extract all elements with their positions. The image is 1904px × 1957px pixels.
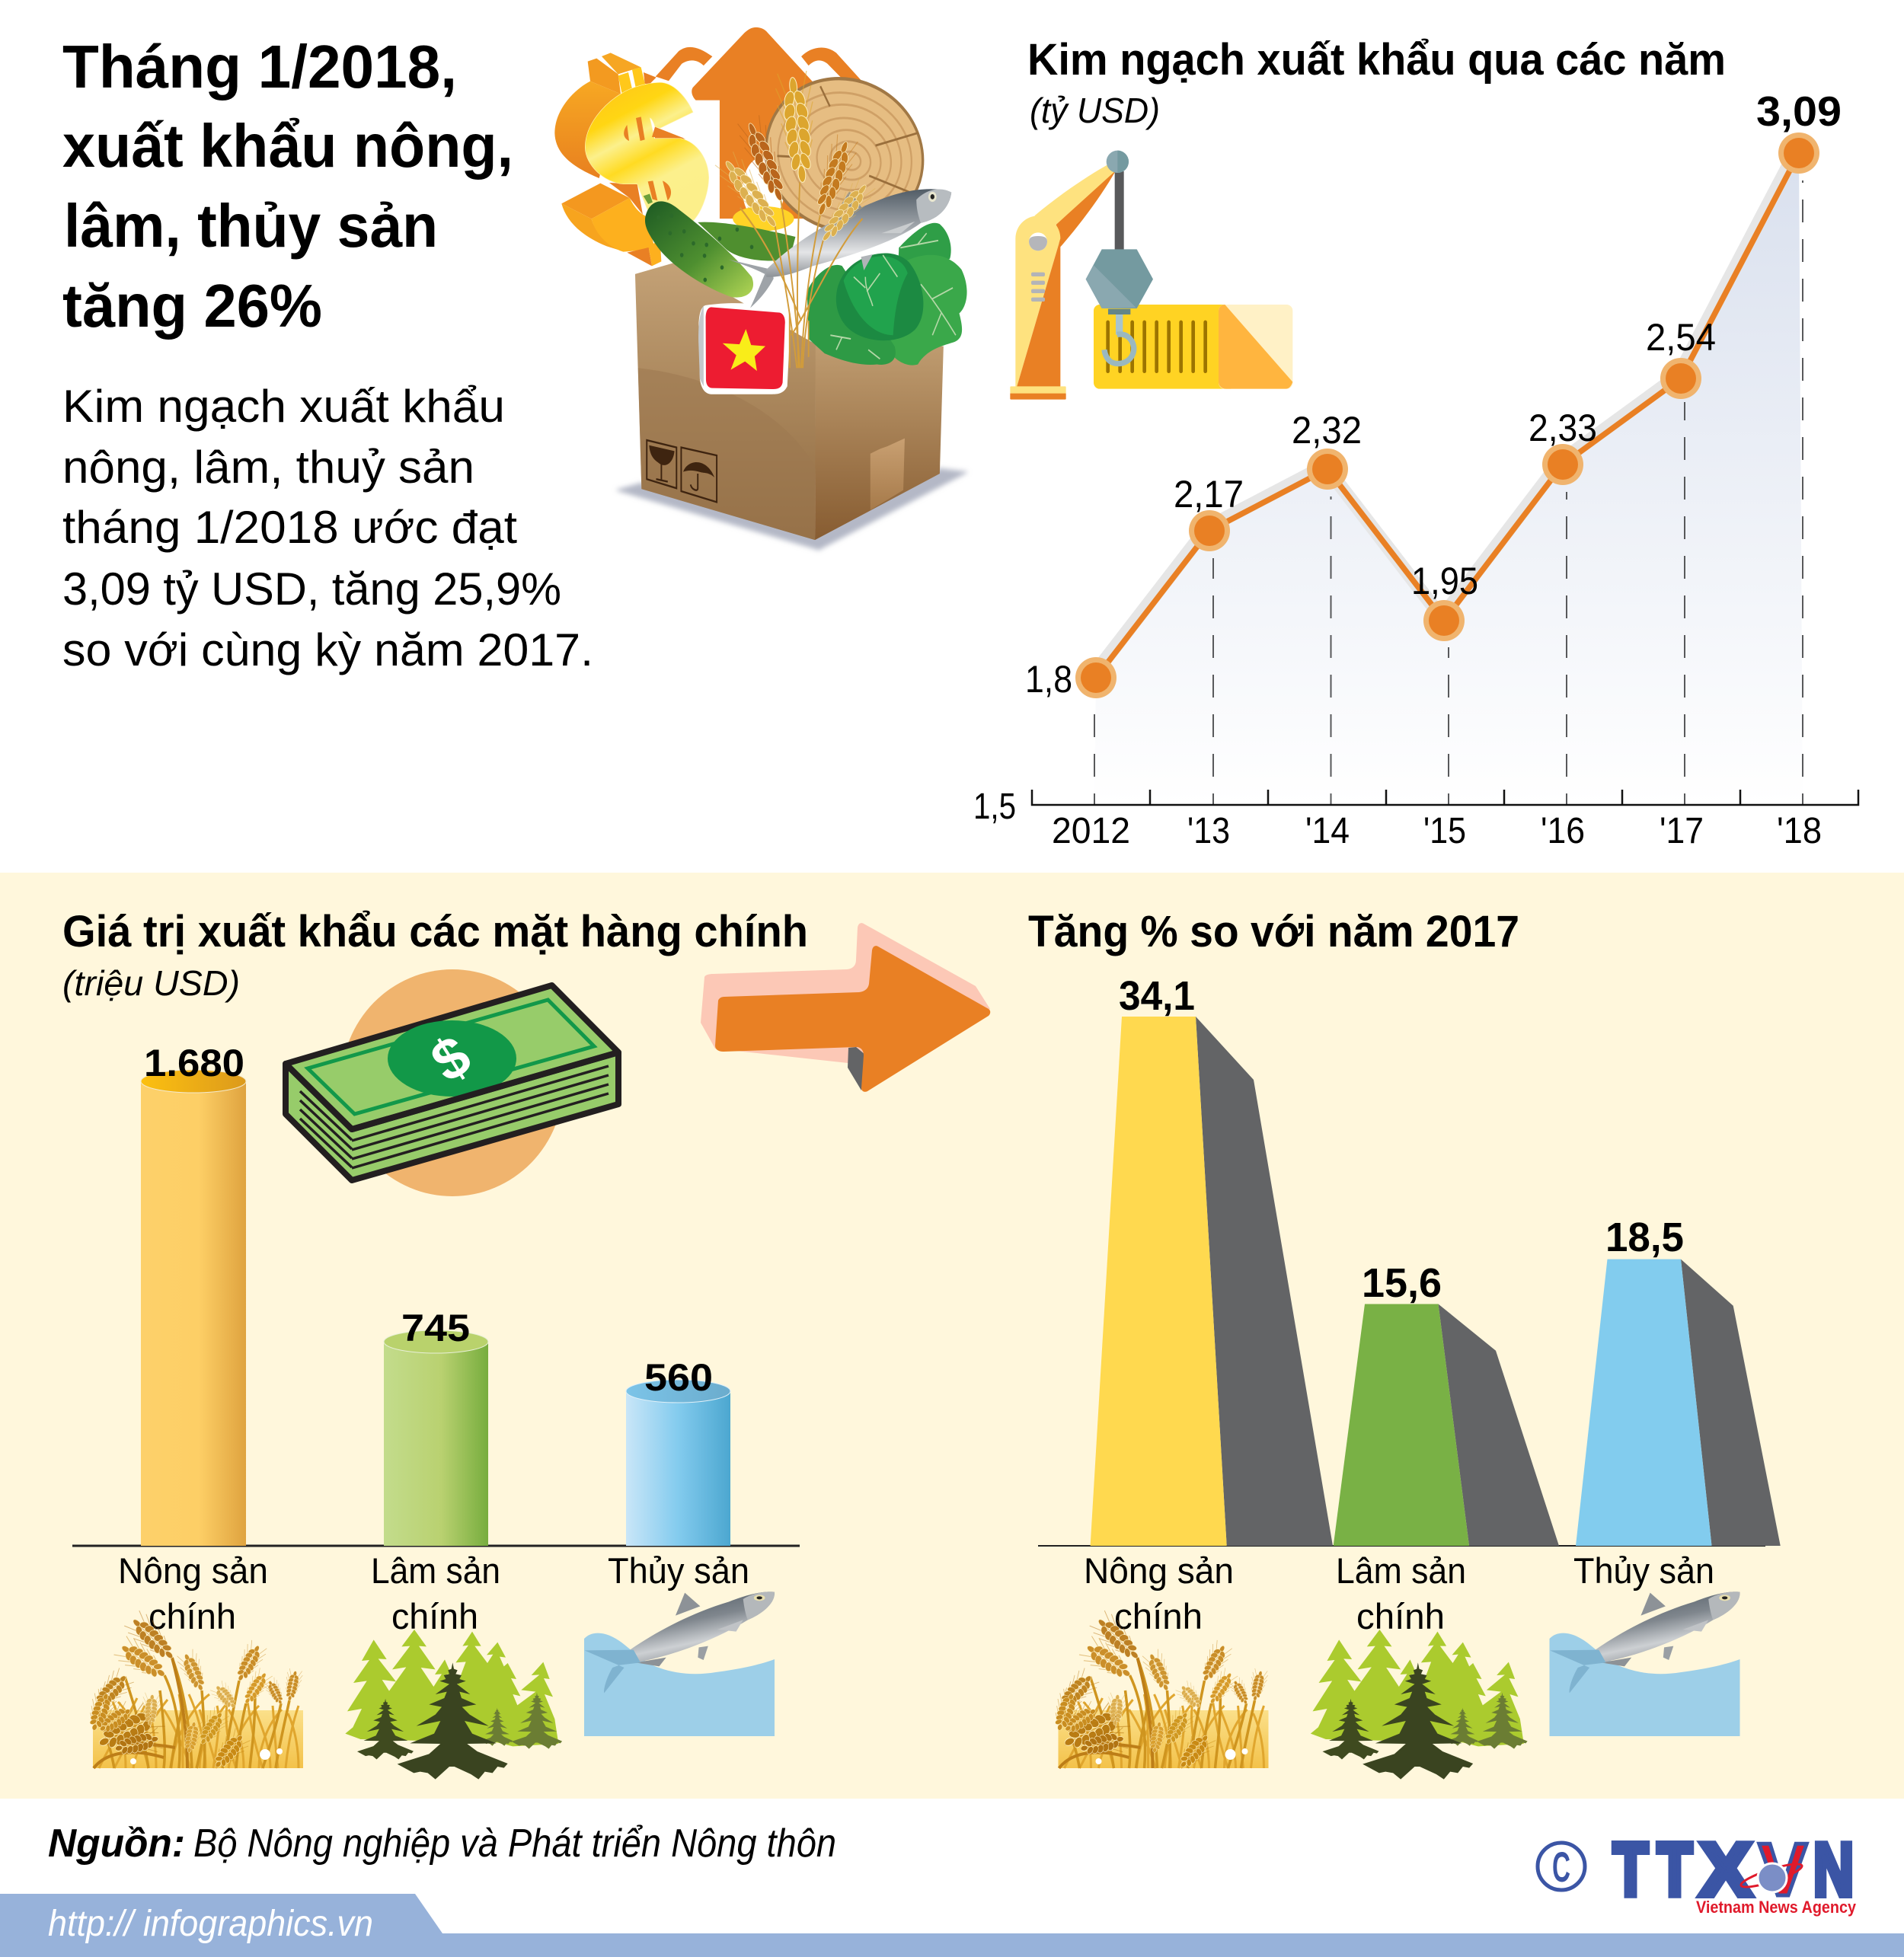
data labels: 2,17: [1174, 473, 1244, 516]
data labels: 2,33: [1529, 407, 1597, 449]
logo: TTXVN: Vietnam News Agency: [1696, 1898, 1857, 1917]
logo: TTXVN: T: [1657, 1828, 1692, 1911]
category labels: Lâm sản: [371, 1550, 500, 1591]
logo: TTXVN: T: [1613, 1828, 1648, 1911]
text block: summary: [62, 381, 593, 675]
category labels: [1084, 1550, 1714, 1636]
data labels: 3,09: [1756, 88, 1842, 135]
category labels: chính: [1356, 1596, 1445, 1636]
axis labels: 1,5: [973, 787, 1016, 827]
logo: TTXVN: [1538, 1828, 1857, 1917]
data labels: 2,32: [1292, 409, 1362, 452]
title: lâm, thủy sản: [64, 192, 438, 260]
chart axis: [1038, 1545, 1765, 1547]
panel: cream background band: [0, 873, 1904, 1799]
bar: forestry: 745: [401, 1307, 470, 1349]
title: tăng 26%: [62, 272, 322, 340]
axis labels: '15: [1423, 811, 1466, 851]
chart heading: Kim ngạch xuất khẩu qua các năm: [1027, 35, 1726, 85]
bar: forestry growth: [1334, 1260, 1559, 1546]
icon: forest: [1311, 1630, 1528, 1780]
arrow: [701, 923, 990, 1092]
axis labels: '13: [1187, 811, 1230, 851]
logo: TTXVN: N: [1813, 1828, 1854, 1911]
panel: introduction: [62, 33, 593, 675]
data points: [1075, 132, 1819, 698]
logo: TTXVN: X: [1700, 1828, 1752, 1911]
bar: agriculture growth: 34,1: [1119, 973, 1195, 1019]
bar: fishery growth: [1576, 1215, 1781, 1546]
bar: agriculture growth: [1091, 973, 1333, 1546]
bar: fishery growth: 18,5: [1605, 1215, 1684, 1260]
footer strip: [0, 1894, 1904, 1957]
panel: growth compared with 2017: [1028, 907, 1781, 1780]
bar: forestry growth: 15,6: [1362, 1260, 1442, 1306]
line series: [1094, 150, 1799, 678]
icon: crane lifting container: [1010, 151, 1292, 400]
axis labels: [973, 787, 1822, 851]
icon: fish and wave: [584, 1591, 775, 1736]
bar: fishery: 560: [644, 1356, 713, 1399]
line chart dashed guides: [1094, 180, 1803, 805]
axis labels: '17: [1660, 811, 1704, 851]
icon: wheat: [83, 1609, 303, 1774]
heading: Giá trị xuất khẩu các mặt hàng chính: [62, 907, 808, 956]
text block: summary: Kim ngạch xuất khẩu: [62, 381, 505, 432]
category labels: chính: [149, 1596, 236, 1636]
chart axis: [72, 1544, 800, 1547]
text block: summary: 3,09 tỷ USD, tăng 25,9%: [62, 563, 561, 615]
title: [62, 33, 513, 340]
category labels: Nông sản: [1084, 1550, 1234, 1591]
category labels: Thủy sản: [608, 1550, 749, 1591]
logo: TTXVN: V: [1759, 1828, 1807, 1911]
text block: summary: so với cùng kỳ năm 2017.: [62, 624, 593, 675]
illustration: export box with produce: [554, 27, 969, 551]
data labels: 1,95: [1411, 560, 1478, 602]
panel: export turnover line chart: [973, 35, 1858, 851]
icon: forest: [345, 1630, 562, 1780]
axis labels: '16: [1541, 811, 1585, 851]
bar: agriculture: [141, 1042, 246, 1546]
category labels: Nông sản: [118, 1550, 268, 1591]
icon: money stack: [286, 969, 618, 1196]
axis labels: '14: [1305, 811, 1350, 851]
category labels: chính: [391, 1596, 478, 1636]
axis labels: '18: [1777, 811, 1822, 851]
data labels: 1,8: [1025, 658, 1072, 701]
category labels: [118, 1550, 749, 1636]
icon: wheat: [1048, 1609, 1269, 1774]
category labels: chính: [1114, 1596, 1203, 1636]
bar: agriculture: 1.680: [144, 1042, 244, 1084]
text block: summary: nông, lâm, thuỷ sản: [62, 442, 474, 493]
data labels: 2,54: [1646, 316, 1716, 359]
icon: fish and wave: [1549, 1591, 1739, 1736]
title: xuất khẩu nông,: [62, 112, 513, 180]
logo: TTXVN: C: [1552, 1843, 1570, 1891]
website url: http:// infographics.vn: [48, 1904, 373, 1944]
axis labels: 2012: [1052, 811, 1130, 851]
source note: Nguồn:: [48, 1821, 185, 1866]
axis: [1032, 790, 1858, 805]
chart unit: (tỷ USD): [1030, 91, 1160, 130]
heading: Tăng % so với năm 2017: [1028, 907, 1519, 956]
title: Tháng 1/2018,: [62, 33, 457, 101]
category labels: Lâm sản: [1336, 1550, 1466, 1591]
source note: Bộ Nông nghiệp và Phát triển Nông thôn: [193, 1821, 836, 1866]
category labels: Thủy sản: [1573, 1550, 1714, 1591]
bar: forestry: [384, 1307, 488, 1546]
data labels: [1025, 88, 1842, 701]
area under line: [1094, 153, 1803, 805]
money dollar sign: $: [420, 1023, 482, 1095]
bar: fishery: [626, 1356, 730, 1546]
unit: (triệu USD): [62, 963, 240, 1003]
panel: export value by product: [62, 907, 808, 1780]
text block: summary: tháng 1/2018 ước đạt: [62, 502, 517, 553]
